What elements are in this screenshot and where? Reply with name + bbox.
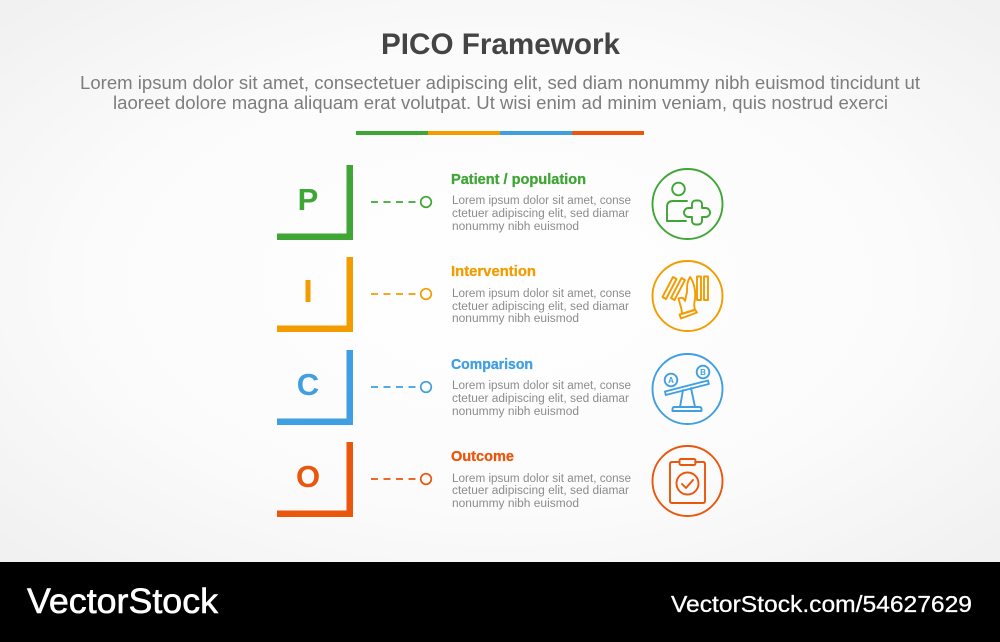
letter O: O (296, 459, 320, 494)
connector P (371, 197, 431, 207)
subtitle text: Lorem ipsum dolor sit amet, consectetuer adipiscing elit, sed diam nonummy nibh euismod tincidunt ut (80, 73, 920, 93)
letter I (306, 280, 310, 302)
icon: hand stopping dominoes (652, 261, 722, 331)
description P: nonummy nibh euismod (452, 221, 579, 233)
icon: patient with plus (652, 169, 722, 239)
subtitle text: laoreet dolore magna aliquam erat volutpat. Ut wisi enim ad minim veniam, quis nostrud exerci (113, 93, 888, 113)
description O: nonummy nibh euismod (452, 498, 579, 510)
icon: seesaw A and B: A (668, 376, 674, 385)
letter P: P (298, 182, 318, 217)
colored divider bar (356, 131, 644, 135)
footer URL: VectorStock.com/54627629 (671, 591, 972, 617)
description O (452, 473, 631, 510)
connector I (371, 289, 431, 299)
bracket O (277, 442, 353, 517)
connector C (371, 382, 431, 392)
bracket C (277, 350, 353, 425)
icon: seesaw A and B (652, 354, 722, 424)
footer brand: VectorStock (27, 582, 219, 621)
heading: Outcome: Outcome (451, 448, 514, 465)
bracket P (277, 165, 353, 240)
description I: nonummy nibh euismod (452, 313, 579, 325)
title: PICO Framework (381, 28, 620, 61)
description P: ctetuer adipiscing elit, sed diamar (452, 208, 629, 220)
icon: clipboard with check (652, 446, 722, 516)
row: Outcome (277, 442, 722, 517)
description P (452, 195, 631, 233)
heading: Patient / population: Patient / population (451, 171, 586, 188)
description C: nonummy nibh euismod (452, 406, 579, 418)
heading: Comparison: Comparison (451, 356, 533, 373)
row: Comparison (277, 350, 722, 425)
description O: Lorem ipsum dolor sit amet, conse (452, 473, 631, 485)
subtitle text (80, 73, 920, 113)
heading: Intervention: Intervention (451, 263, 536, 280)
bracket I (277, 257, 353, 332)
connector O (371, 474, 431, 484)
icon: seesaw A and B: B (700, 368, 706, 377)
row: Patient / population (277, 165, 722, 240)
description C: ctetuer adipiscing elit, sed diamar (452, 393, 629, 405)
description I: ctetuer adipiscing elit, sed diamar (452, 301, 629, 313)
row: Intervention (277, 257, 722, 332)
description P: Lorem ipsum dolor sit amet, conse (452, 195, 631, 207)
letter C: C (297, 367, 319, 402)
description C (452, 380, 631, 418)
description I: Lorem ipsum dolor sit amet, conse (452, 288, 631, 300)
description I (452, 288, 631, 325)
footer bar (0, 562, 1000, 642)
description O: ctetuer adipiscing elit, sed diamar (452, 485, 629, 497)
description C: Lorem ipsum dolor sit amet, conse (452, 380, 631, 392)
